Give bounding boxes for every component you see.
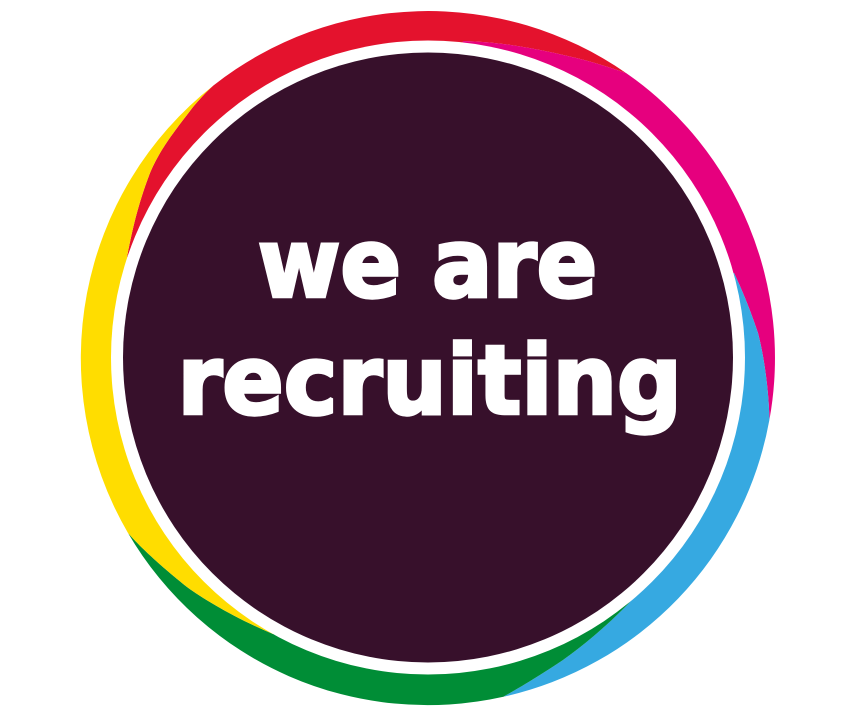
ring segment: yellow xyxy=(81,86,428,634)
ring segment: magenta xyxy=(428,41,775,420)
dark centre disc xyxy=(123,52,733,662)
heading line: we are: we are xyxy=(258,210,597,320)
ring segment: blue xyxy=(428,273,769,697)
ring segment: green xyxy=(128,358,630,705)
heading: we are recruiting xyxy=(178,210,682,436)
ring segment: red xyxy=(127,11,626,358)
white inner ring xyxy=(111,40,745,674)
heading line: recruiting: recruiting xyxy=(178,326,682,436)
